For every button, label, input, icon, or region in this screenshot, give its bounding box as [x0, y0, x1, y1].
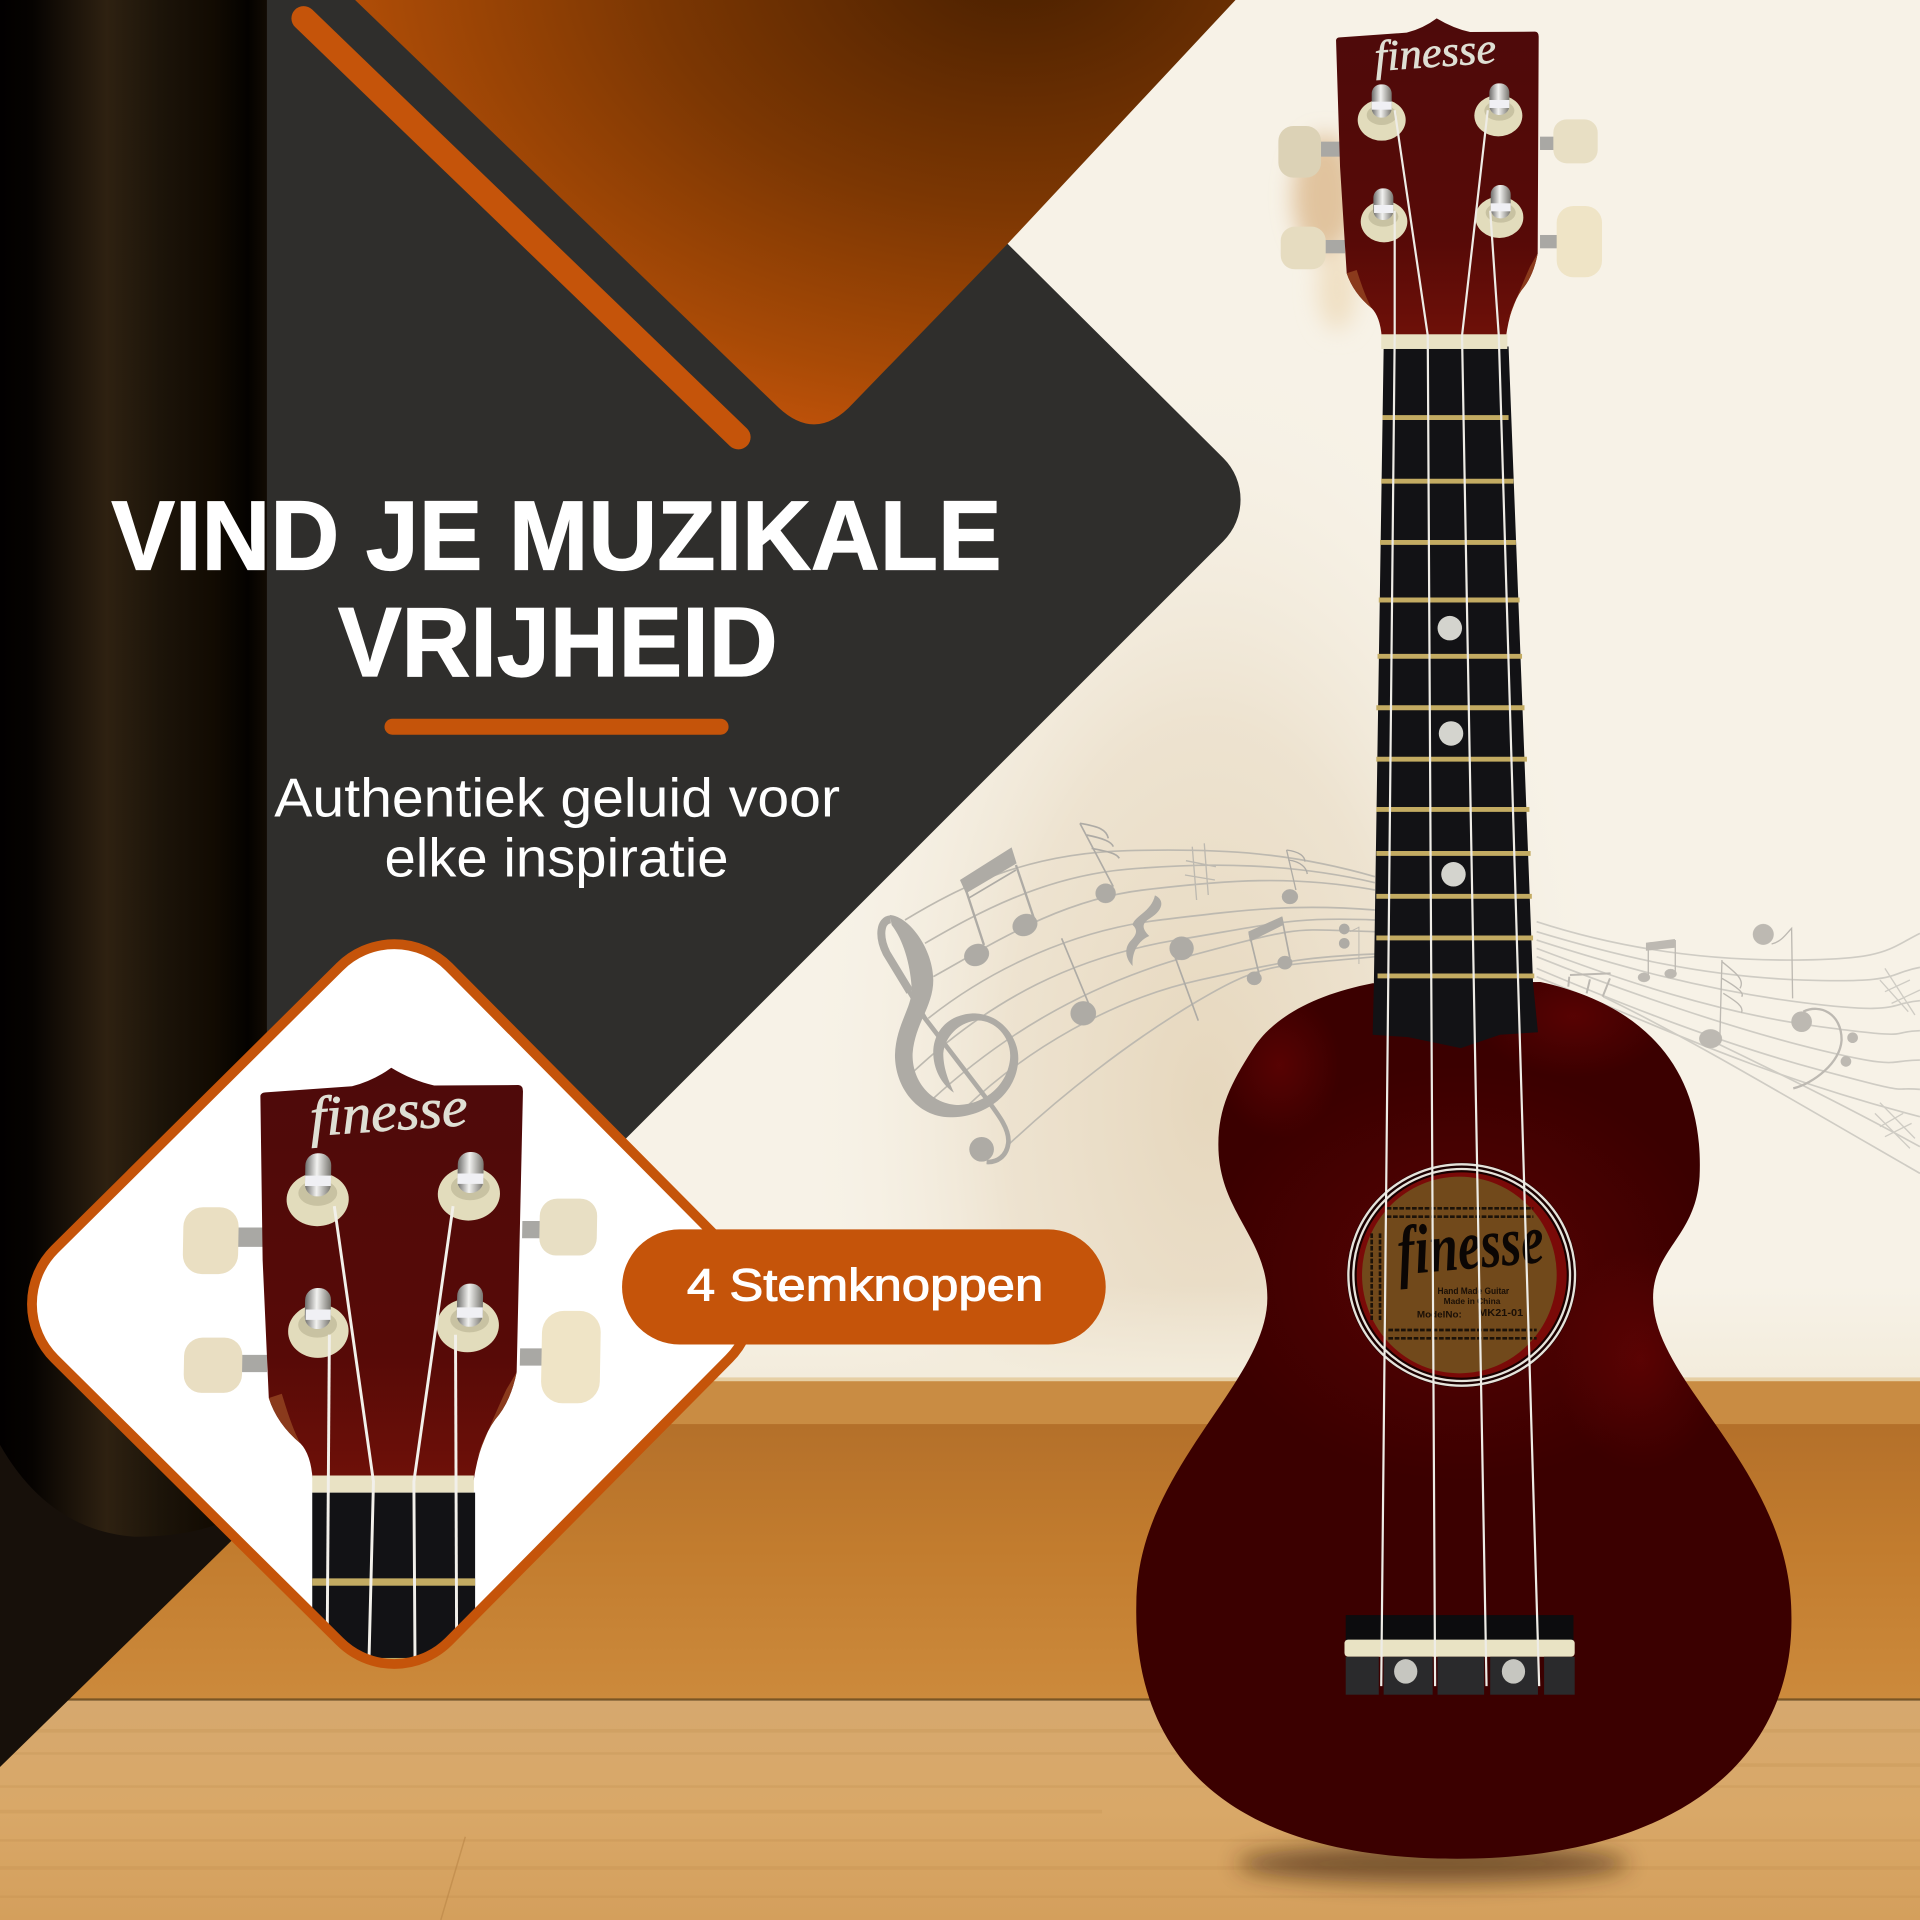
label small print — [1417, 1286, 1524, 1319]
tuning knobs — [1278, 119, 1602, 277]
head edge sheen — [1347, 253, 1538, 320]
flagged note — [1080, 823, 1119, 903]
label logo: finesse — [1394, 1201, 1547, 1291]
ukulele floor shadow — [1237, 1844, 1629, 1883]
rest — [1126, 895, 1161, 966]
subtitle — [274, 767, 840, 889]
sharp sign — [1185, 843, 1216, 900]
upper note right — [1753, 924, 1793, 998]
label ornaments — [1372, 1208, 1537, 1338]
orange top triangle — [355, 0, 1236, 424]
flagged note right — [1699, 960, 1742, 1048]
music notes right of the neck — [1537, 922, 1920, 1173]
label small print: MK21-01 — [1478, 1308, 1524, 1319]
orange diagonal stripe — [304, 18, 738, 437]
skirting board — [0, 1378, 1920, 1701]
label small print: Hand Made Guitar — [1438, 1286, 1510, 1296]
dark diamond panel — [230, 0, 1241, 1534]
inset neck — [312, 1476, 475, 1676]
partly hidden beam — [1568, 973, 1611, 997]
fret markers — [1438, 616, 1466, 887]
bass clef — [1791, 1009, 1858, 1088]
nut — [1381, 334, 1507, 349]
small note pair — [1247, 917, 1292, 985]
treble clef — [881, 915, 1018, 1162]
wooden floor — [0, 1701, 1920, 1920]
sharp signs right — [1875, 968, 1920, 1148]
music notes left of the neck — [881, 823, 1375, 1162]
inset headstock — [179, 1068, 605, 1480]
fretboard — [1373, 347, 1538, 1048]
dark curtain corner — [0, 0, 267, 1767]
inset headstock: finesse — [308, 1076, 469, 1149]
inset strings — [327, 1206, 457, 1676]
frets — [1376, 418, 1534, 976]
ukulele — [1136, 18, 1791, 1859]
inset orange border — [32, 944, 752, 1664]
beamed pair — [1638, 939, 1677, 982]
title — [111, 480, 1002, 697]
repeat dots — [1339, 924, 1359, 964]
subtitle: elke inspiratie — [384, 827, 729, 889]
small flagged note — [1282, 850, 1307, 904]
head plate — [1336, 18, 1539, 337]
headstock wall shadow — [1293, 135, 1357, 331]
ukulele body — [1136, 955, 1791, 1859]
label small print: ModelNo: — [1417, 1309, 1462, 1319]
label pill: 4 Stemknoppen — [687, 1259, 1043, 1310]
inset close-up clipped content — [179, 1068, 605, 1676]
title: VRIJHEID — [338, 587, 778, 697]
tuner pegs — [1358, 83, 1523, 242]
label small print: Made in China — [1444, 1297, 1501, 1306]
label pill — [622, 1229, 1106, 1344]
title underline — [384, 719, 729, 735]
brand: finesse — [1373, 25, 1498, 81]
eighth note pair — [960, 847, 1041, 970]
quarter notes — [1062, 937, 1198, 1025]
sound hole — [1347, 1163, 1577, 1387]
title: VIND JE MUZIKALE — [111, 480, 1002, 590]
inset detail diamond — [32, 944, 752, 1676]
strings — [1381, 110, 1539, 1686]
bridge — [1344, 1615, 1575, 1695]
main headstock — [1278, 18, 1602, 337]
subtitle: Authentiek geluid voor — [274, 767, 840, 829]
